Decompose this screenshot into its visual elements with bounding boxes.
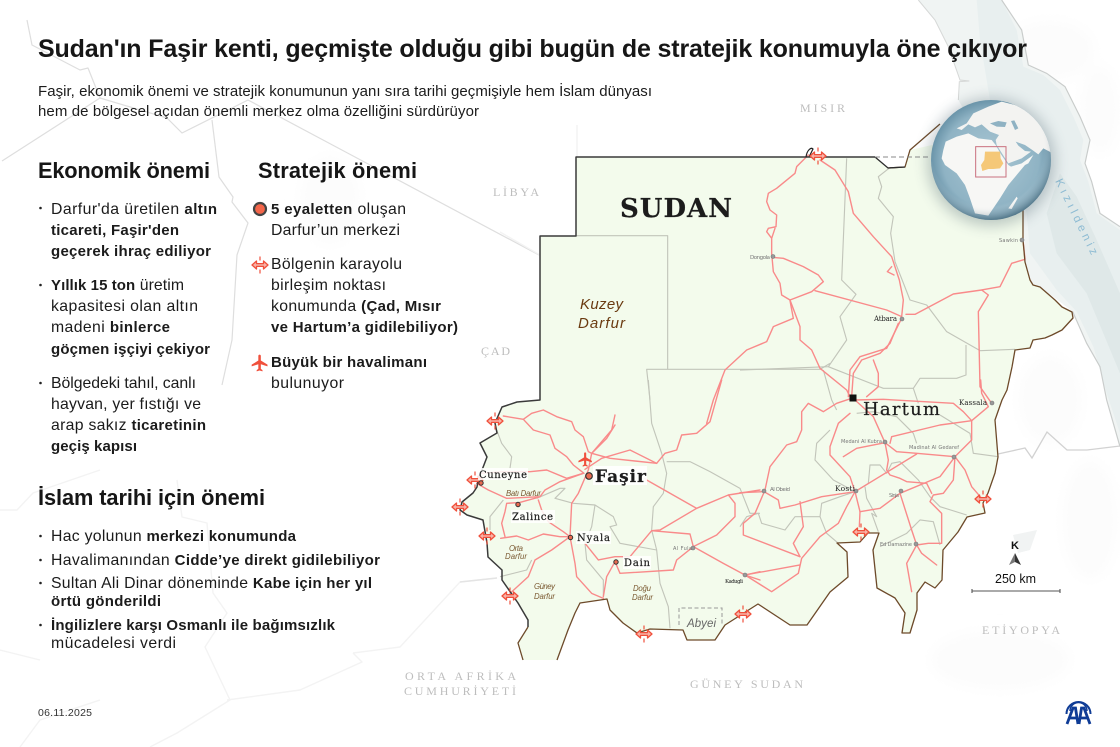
- border crossings: [452, 148, 991, 642]
- bullets: geçerek ihraç ediliyor: [51, 243, 211, 260]
- title: Sudan'ın Faşir kenti, geçmişte olduğu gibi bugün de stratejik konumuyla öne çıkıyor: [38, 35, 1027, 63]
- small cities: Medani Al Kubra: [841, 439, 882, 445]
- neighbouring country labels: LİBYA: [493, 185, 539, 199]
- state labels: Doğu: [633, 584, 652, 593]
- icon: city dot: [254, 203, 266, 215]
- city: Nyala: Nyala: [577, 533, 610, 544]
- bullets: Bölgedeki tahıl, canlı: [51, 375, 196, 392]
- border: east and south: [518, 124, 1073, 660]
- bullets: İngilizlere karşı Osmanlı ile bağımsızlık: [51, 617, 336, 634]
- internal state boundaries: [490, 158, 1015, 628]
- text: road junction: [271, 256, 458, 336]
- text: airport: bulunuyor: [271, 375, 344, 392]
- text: airport: Büyük bir havalimanı: [271, 354, 427, 371]
- bullets: ticareti, Faşir'den: [51, 222, 179, 239]
- state labels: Darfur: [578, 315, 626, 332]
- small cities: Atbara: [873, 315, 897, 323]
- bullets: kapasitesi olan altın: [51, 298, 198, 315]
- bullets: Havalimanından Cidde’ye direkt gidilebiliyor: [51, 552, 380, 569]
- small cities: Ed Damazine: [880, 542, 912, 548]
- city: Cuneyne: [478, 468, 528, 485]
- state labels: Güney: [534, 582, 556, 591]
- country fill: [460, 145, 1073, 660]
- text: five states: [271, 201, 406, 239]
- city: Cuneyne: Cuneyne: [479, 470, 527, 481]
- text: road junction: konumunda (Çad, Mısır: [271, 298, 441, 315]
- bullets: [39, 528, 380, 652]
- state labels: Orta: [509, 544, 524, 553]
- bullets: mücadelesi verdi: [51, 635, 176, 652]
- subtitle: Faşir, ekonomik önemi ve stratejik konumunun yanı sıra tarihi geçmişiyle hem İslam dünyası: [38, 82, 652, 100]
- neighbouring country labels: [404, 101, 1060, 698]
- date: 06.11.2025: [38, 707, 92, 719]
- small cities: Madinat Al Gedaref: [909, 445, 959, 451]
- bullets: örtü gönderildi: [51, 593, 161, 610]
- small cities: Dongola: [750, 255, 770, 261]
- icon: plane: [252, 355, 268, 371]
- bullets: geçiş kapısı: [51, 438, 137, 455]
- small cities: Kassala: [959, 399, 987, 407]
- capital: Hartum: Hartum: [863, 399, 940, 420]
- subtitle: hem de bölgesel açıdan önemli merkez olma özelliğini sürdürüyor: [38, 103, 479, 120]
- state labels: Batı Darfur: [506, 489, 541, 498]
- north arrow and scale: [972, 540, 1060, 593]
- neighbouring country labels: ETİYOPYA: [982, 623, 1060, 637]
- small cities: Kosti: [835, 484, 856, 493]
- text: five states: 5 eyaletten oluşan: [271, 201, 406, 218]
- text: road junction: ve Hartum’a gidilebiliyor): [271, 319, 458, 336]
- locator globe: [927, 98, 1055, 226]
- neighbouring country labels: GÜNEY SUDAN: [690, 677, 803, 691]
- city: Dain: [614, 556, 651, 569]
- state labels: Abyei: [686, 618, 716, 630]
- subtitle: [38, 82, 652, 120]
- bullets: Darfur'da üretilen altın: [51, 201, 217, 218]
- bullets: [39, 201, 217, 455]
- small cities: Al Fula: [673, 546, 692, 552]
- heading: Ekonomik önemi: [38, 158, 210, 183]
- state labels: Darfur: [632, 593, 653, 602]
- bullets: Yıllık 15 ton üretim: [51, 277, 184, 294]
- north arrow and scale: 250 km: [995, 572, 1036, 586]
- north arrow and scale: K: [1011, 540, 1019, 552]
- roads: [477, 155, 1025, 598]
- state labels: Darfur: [505, 552, 527, 561]
- text: airport: [271, 354, 427, 392]
- Abyei boundary: [679, 608, 722, 625]
- border: west and north: [460, 157, 875, 627]
- neighbouring country labels: ORTA AFRİKA: [405, 669, 516, 683]
- small cities: Kadugli: [725, 579, 743, 585]
- map: Sudan: [452, 124, 1073, 660]
- city: Nyala: [568, 531, 611, 544]
- country label: SUDAN: [620, 194, 732, 224]
- panel: İslam tarihi için önemi: [38, 485, 380, 652]
- icon: airport: [578, 452, 592, 467]
- neighbouring country labels: ÇAD: [481, 344, 510, 358]
- panel: Stratejik önemi: [252, 158, 458, 392]
- city: Faşir: Faşir: [595, 467, 647, 487]
- bullets: Sultan Ali Dinar döneminde Kabe için her yıl: [51, 575, 372, 592]
- text: road junction: Bölgenin karayolu: [271, 256, 402, 273]
- neighbouring country labels: CUMHURİYETİ: [404, 684, 516, 698]
- state labels: Darfur: [534, 592, 555, 601]
- state labels: Kuzey: [580, 296, 624, 313]
- city: Dain: Dain: [624, 558, 651, 569]
- logo: AA: [1066, 702, 1090, 724]
- panel: Ekonomik önemi: [38, 158, 217, 455]
- heading: Stratejik önemi: [258, 158, 417, 183]
- icon: road crossing: [252, 256, 268, 274]
- bullets: madeni binlerce: [51, 319, 170, 336]
- bullets: göçmen işçiyi çekiyor: [51, 341, 210, 358]
- bullets: arap sakız ticaretinin: [51, 417, 206, 434]
- sea label: Kızıldeniz: [1052, 177, 1100, 257]
- small cities: Sinja: [889, 493, 899, 499]
- small cities: Al Obeid: [770, 487, 790, 493]
- bullets: hayvan, yer fıstığı ve: [51, 396, 201, 413]
- bullets: Hac yolunun merkezi konumunda: [51, 528, 297, 545]
- small cities: Sawkin: [999, 238, 1018, 244]
- neighbouring country labels: MISIR: [800, 101, 845, 115]
- city: Zalince: [511, 502, 555, 523]
- heading: İslam tarihi için önemi: [38, 485, 265, 510]
- state labels: [505, 296, 716, 630]
- small cities: [673, 238, 1024, 585]
- text: road junction: birleşim noktası: [271, 277, 386, 294]
- text: five states: Darfur’un merkezi: [271, 222, 400, 239]
- city: Zalince: Zalince: [512, 512, 553, 523]
